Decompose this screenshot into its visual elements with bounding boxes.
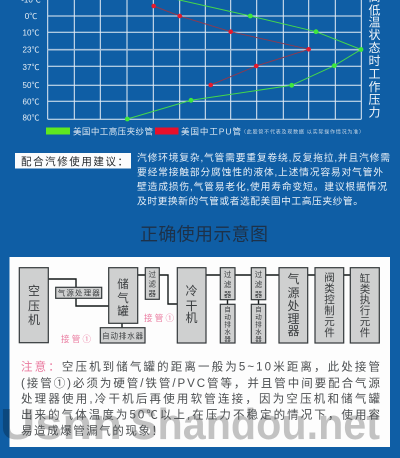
air compressor: 压 xyxy=(28,299,40,313)
chart legend: （此胶管不代表及现数据 以实际操作情况为准） xyxy=(241,128,364,136)
air tank: 气 xyxy=(117,291,129,305)
vertical axis title: 作 xyxy=(368,80,381,94)
air tank xyxy=(109,268,138,323)
advice label: 配合汽修使用建议： xyxy=(21,155,128,168)
drain 2: 器 xyxy=(224,335,231,343)
chart legend: 美国中工PU管 xyxy=(181,126,241,136)
vertical axis title: 时 xyxy=(368,54,381,68)
caution note: 易造成爆管漏气的现象！ xyxy=(21,424,163,438)
drain 3: 排 xyxy=(255,320,262,328)
temperature axis labels xyxy=(21,0,41,122)
refrigerated dryer: 冷 xyxy=(185,284,198,298)
filter 1: 器 xyxy=(149,289,157,298)
filter 2: 过 xyxy=(224,269,232,279)
valve control elements: 件 xyxy=(324,327,335,339)
valve control elements: 控 xyxy=(324,293,335,306)
caution note: (接管①)必须为硬管/铁管/PVC管等，并且管中间要配合气源 xyxy=(21,376,380,390)
vertical axis title: 压 xyxy=(368,92,381,106)
advice text block: 汽修环境复杂,气管需要重复卷绕,反复拖拉,并且汽修需 xyxy=(137,151,390,164)
advice text block xyxy=(137,151,390,208)
valve control elements: 类 xyxy=(324,282,335,295)
connecting pipes xyxy=(48,275,351,328)
advice text block: 壁造成损伤,气管易老化,使用寿命变短。建议根据情况 xyxy=(137,180,387,193)
air source processor large: 理 xyxy=(287,312,300,326)
air source processor large: 处 xyxy=(287,299,300,313)
air source processor large: 气 xyxy=(287,271,300,286)
vertical axis title: 温 xyxy=(368,16,381,30)
temperature axis labels: 23℃ xyxy=(23,46,39,54)
refrigerated dryer: 机 xyxy=(185,311,198,325)
temperature axis labels: 0℃ xyxy=(25,12,37,21)
filter 1: 过 xyxy=(149,269,157,279)
advice text block: 要经常接触部分腐蚀性的液体,上述情况容易对气管外 xyxy=(137,166,383,178)
cylinder actuator elements: 行 xyxy=(360,304,371,317)
cylinder actuator elements: 缸 xyxy=(360,272,371,285)
vertical axis title: 工 xyxy=(368,67,381,81)
air compressor xyxy=(19,268,48,343)
filter 2: 器 xyxy=(224,290,232,299)
valve control elements: 元 xyxy=(324,316,335,328)
vertical axis title: 状 xyxy=(368,28,381,42)
filter 3: 器 xyxy=(255,290,263,299)
auto drain xyxy=(100,328,145,343)
drain 3: 器 xyxy=(255,335,262,343)
connector label 2: 接管① xyxy=(144,313,174,323)
cylinder actuator elements: 件 xyxy=(360,327,370,339)
cylinder actuator elements: 类 xyxy=(360,282,371,296)
refrigerated dryer: 干 xyxy=(185,299,198,313)
air compressor: 空 xyxy=(28,284,40,298)
cylinder actuator elements xyxy=(350,268,379,343)
caution note: 注意：空压机到储气罐的距离一般为5~10米距离，此处接管 xyxy=(21,360,380,374)
air source processor large: 源 xyxy=(287,286,300,300)
temperature axis labels: 10℃ xyxy=(23,28,39,37)
air source processor large: 器 xyxy=(287,324,300,338)
cylinder actuator elements: 执 xyxy=(360,293,371,306)
filter 3 xyxy=(251,268,266,300)
drain 2: 排 xyxy=(224,320,231,328)
chart legend: 美国中工高压夹纱管 xyxy=(73,126,153,136)
vertical axis title: 态 xyxy=(368,41,381,55)
temperature axis labels: 60℃ xyxy=(23,98,39,106)
drain 3: 水 xyxy=(255,327,262,336)
refrigerated dryer xyxy=(177,268,206,343)
filter 3: 滤 xyxy=(255,279,263,289)
valve control elements xyxy=(315,268,344,343)
filter 1: 滤 xyxy=(149,278,157,288)
caution note xyxy=(21,360,380,438)
watermark: Shandou.net xyxy=(130,400,380,449)
temperature axis labels: 50℃ xyxy=(23,81,39,90)
air source processor large xyxy=(279,268,308,343)
drain 3 xyxy=(251,304,266,343)
chart legend xyxy=(46,126,364,136)
white diagram panel xyxy=(10,257,390,447)
drain 2 xyxy=(220,304,235,343)
drain 2: 动 xyxy=(224,313,231,321)
air source processor small: 气源处理器 xyxy=(58,288,100,298)
red line series xyxy=(151,4,311,87)
green line series xyxy=(125,0,363,121)
filter 3: 过 xyxy=(255,269,263,279)
air tank: 储 xyxy=(117,277,129,291)
caution note: 出来的气体温度为50℃以上,在压力不稳定的情况下，使用容 xyxy=(21,408,380,422)
connector label 1: 接管① xyxy=(61,334,91,344)
auto drain: 自动排水器 xyxy=(102,330,144,340)
filter 2 xyxy=(220,268,235,300)
drain 2: 水 xyxy=(224,327,231,336)
temperature pressure line chart xyxy=(21,0,381,122)
drain 3: 动 xyxy=(255,313,262,321)
vertical axis title: 力 xyxy=(368,106,381,120)
caution note: 处理器使用,冷干机后再使用软管连接，因为空压机和储气罐 xyxy=(21,392,380,406)
vertical axis title: 低 xyxy=(368,4,381,18)
advice text block: 及时更换新的气管或者选配美国中工高压夹纱管。 xyxy=(137,194,363,208)
vertical axis title xyxy=(368,0,381,120)
valve control elements: 制 xyxy=(324,304,335,317)
drain 2: 自 xyxy=(224,304,231,314)
air compressor: 机 xyxy=(28,313,40,327)
section heading: 正确使用示意图 xyxy=(140,224,268,244)
temperature axis labels: 80℃ xyxy=(23,114,39,122)
temperature axis labels: 37℃ xyxy=(23,63,39,72)
watermark xyxy=(0,400,380,449)
cylinder actuator elements: 元 xyxy=(360,316,371,328)
filter 2: 滤 xyxy=(224,279,232,289)
filter 1 xyxy=(145,268,159,299)
watermark: Usnn xyxy=(0,400,122,449)
air tank: 罐 xyxy=(117,305,129,318)
drain 3: 自 xyxy=(255,304,262,314)
valve control elements: 阀 xyxy=(324,271,335,284)
